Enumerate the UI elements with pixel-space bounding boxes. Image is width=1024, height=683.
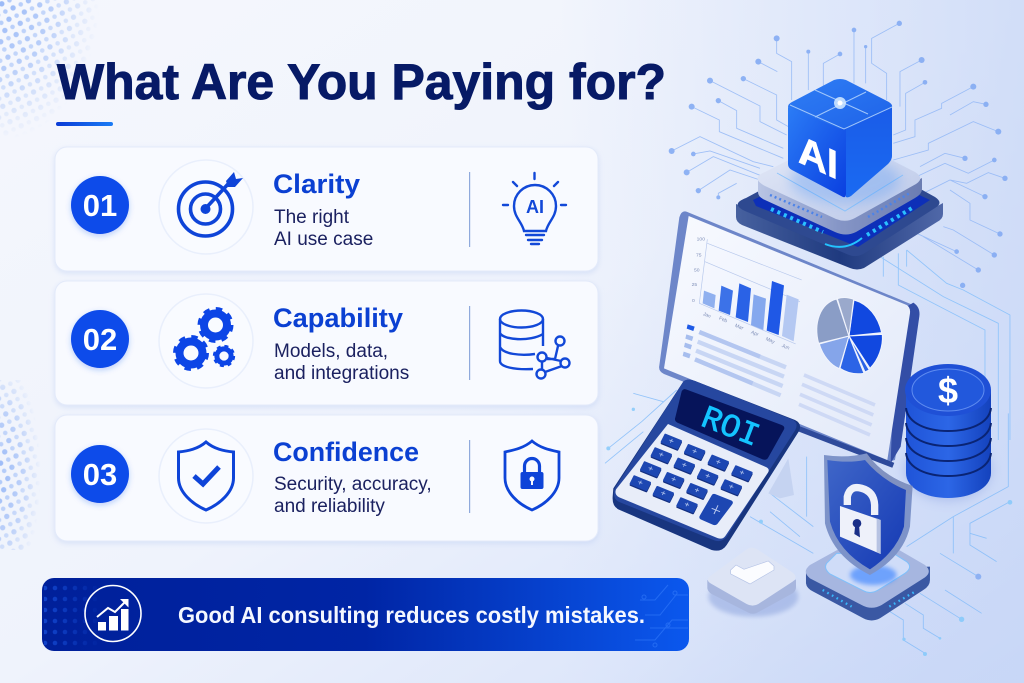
- text: capability description: Models, data,: [274, 341, 388, 362]
- title: What Are You Paying for?: [57, 54, 666, 110]
- illustration: calculator: [613, 380, 800, 551]
- pie chart: [817, 297, 882, 374]
- monitor screen: [664, 216, 910, 460]
- axis labels: 100: [697, 237, 705, 243]
- check glyph: [731, 561, 774, 584]
- illustration: coin stack: [905, 364, 991, 500]
- shield body: [824, 453, 913, 575]
- text: capability description: and integrations: [274, 363, 409, 384]
- icon: database network: [500, 310, 570, 378]
- text: confidence description: and reliability: [274, 496, 385, 517]
- axis labels: [692, 237, 790, 352]
- axis labels: May: [765, 336, 776, 346]
- shield base: [806, 547, 930, 620]
- dollar sign: $: [938, 370, 958, 411]
- axis labels: 75: [696, 253, 702, 259]
- bar chart: [703, 281, 799, 341]
- axis labels: Feb: [718, 316, 728, 324]
- divider: [469, 306, 470, 380]
- chip base: [736, 148, 943, 270]
- icon: growth chart: [85, 586, 141, 642]
- axis labels: Mar: [734, 323, 744, 332]
- calculator stand: [768, 458, 794, 498]
- text: confidence description: Security, accuracy,: [274, 474, 432, 495]
- axis labels: 25: [692, 282, 697, 288]
- ROI readout: ROI: [696, 400, 764, 456]
- circuit lines upper: [669, 21, 1008, 273]
- panel: clarity: [55, 147, 598, 271]
- icon: shield check: [159, 429, 253, 523]
- silver platform: [758, 136, 922, 234]
- heading: capability: Capability: [273, 303, 403, 333]
- number badge 02: 02: [83, 322, 117, 357]
- icon: target: [159, 160, 253, 254]
- circuit lines right: [880, 250, 1010, 440]
- banner: [42, 578, 689, 651]
- axis labels: Apr: [750, 330, 760, 338]
- cube: [788, 79, 892, 197]
- heading: clarity: Clarity: [273, 169, 360, 199]
- axis labels: 0: [692, 298, 695, 304]
- banner circuit texture: [635, 585, 688, 647]
- halftone dots left-middle: [0, 380, 38, 550]
- banner dot texture: [44, 586, 94, 646]
- circuit lines lower: [605, 390, 1012, 656]
- icon: AI light bulb: [503, 173, 566, 244]
- cube label AI: AI: [798, 126, 838, 188]
- axis labels: Jan: [702, 311, 712, 320]
- number badge 01: [71, 176, 129, 234]
- panel: capability: [55, 281, 598, 405]
- text: clarity description: The right: [274, 207, 350, 228]
- text: clarity description: AI use case: [274, 229, 373, 250]
- number badge 03: [71, 445, 129, 503]
- number badge 03: 03: [83, 457, 117, 492]
- icon: shield lock: [505, 441, 559, 510]
- illustration: AI cube on chip: [736, 79, 943, 270]
- keypad keys: [631, 435, 752, 525]
- halftone dots top-left: [0, 0, 94, 128]
- title underline: [56, 122, 113, 126]
- calculator body: [613, 380, 800, 551]
- banner text: Good AI consulting reduces costly mistakes.: [178, 602, 645, 628]
- display: [675, 389, 784, 460]
- axis labels: 50: [694, 267, 700, 273]
- heading: confidence: Confidence: [273, 437, 419, 467]
- legend and list rows: [683, 324, 875, 435]
- icon: gears: [159, 294, 253, 388]
- axis labels: Jun: [781, 343, 790, 352]
- panel: confidence: [55, 415, 598, 541]
- divider: [469, 440, 470, 513]
- illustration: shield on base: [806, 453, 930, 620]
- number badge 01: 01: [83, 188, 117, 223]
- padlock: [840, 488, 881, 554]
- monitor frame: [659, 211, 918, 463]
- icon: AI light bulb: AI: [526, 197, 544, 217]
- illustration: monitor dashboard: [659, 211, 920, 465]
- illustration: checkmark tile: [707, 548, 798, 617]
- keypad panel: [615, 424, 769, 539]
- divider: [469, 172, 470, 247]
- chart axes: [699, 239, 802, 344]
- number badge 02: [71, 310, 129, 368]
